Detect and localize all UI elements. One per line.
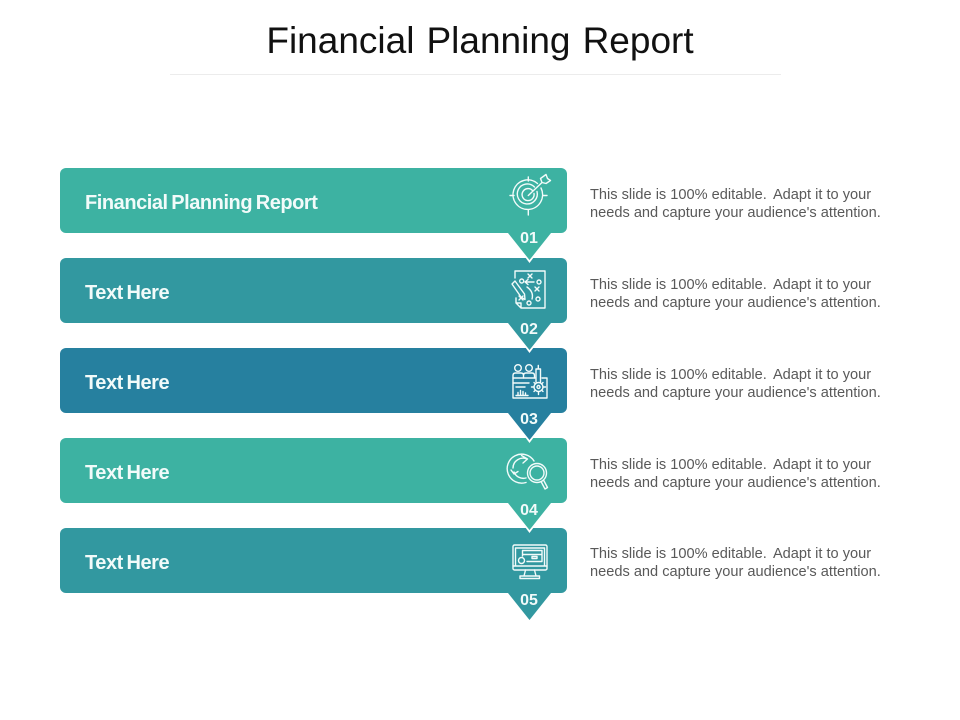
row 03 number: 03 [520, 411, 538, 428]
panel: row 03 [60, 348, 567, 443]
row 03 label: Text Here [85, 372, 169, 394]
text: row 01 description: needs and capture your audience's attention. [590, 205, 881, 221]
panel: row 04 [60, 438, 567, 533]
text: row 05 description: This slide is 100% editable. Adapt it to your [590, 546, 871, 562]
row 04 label: Text Here [85, 462, 169, 484]
icon: target with arrow [509, 174, 552, 216]
icon: strategy plan [511, 270, 546, 309]
row 03 bar [60, 348, 567, 413]
text: row 02 description: needs and capture your audience's attention. [590, 295, 881, 311]
row 04 pointer [508, 503, 551, 533]
row 01 label: Financial Planning Report [85, 192, 317, 214]
text: row 05 description [590, 546, 881, 580]
row 05 pointer [508, 593, 551, 620]
row 04 number: 04 [520, 502, 538, 519]
icon: computer monitor [512, 544, 548, 580]
text: row 02 description [590, 277, 881, 311]
text: row 03 description: This slide is 100% editable. Adapt it to your [590, 367, 871, 383]
row 05 number: 05 [520, 592, 538, 609]
row 02 label: Text Here [85, 282, 169, 304]
row 02 bar [60, 258, 567, 323]
title: Financial Planning Report [266, 20, 694, 61]
text: row 01 description: This slide is 100% editable. Adapt it to your [590, 187, 871, 203]
panel: row 02 [60, 258, 567, 353]
row 02 number: 02 [520, 321, 538, 338]
row 01 pointer [508, 233, 551, 263]
row 05 label: Text Here [85, 552, 169, 574]
row 01 number: 01 [520, 230, 538, 247]
text: row 03 description [590, 367, 881, 401]
text: row 03 description: needs and capture your audience's attention. [590, 385, 881, 401]
row 01 bar [60, 168, 567, 233]
text: row 02 description: This slide is 100% editable. Adapt it to your [590, 277, 871, 293]
row 05 bar [60, 528, 567, 593]
icon: team and gear chart [512, 364, 548, 399]
text: row 04 description: This slide is 100% editable. Adapt it to your [590, 457, 871, 473]
row 03 pointer [508, 413, 551, 443]
text: row 05 description: needs and capture your audience's attention. [590, 564, 881, 580]
row 04 bar [60, 438, 567, 503]
row 02 pointer [508, 323, 551, 353]
text: row 04 description [590, 457, 881, 491]
text: row 01 description [590, 187, 881, 221]
panel: row 01 [60, 168, 567, 263]
text: row 04 description: needs and capture your audience's attention. [590, 475, 881, 491]
icon: magnifier over cycle [506, 453, 548, 490]
panel: row 05 [60, 528, 567, 620]
